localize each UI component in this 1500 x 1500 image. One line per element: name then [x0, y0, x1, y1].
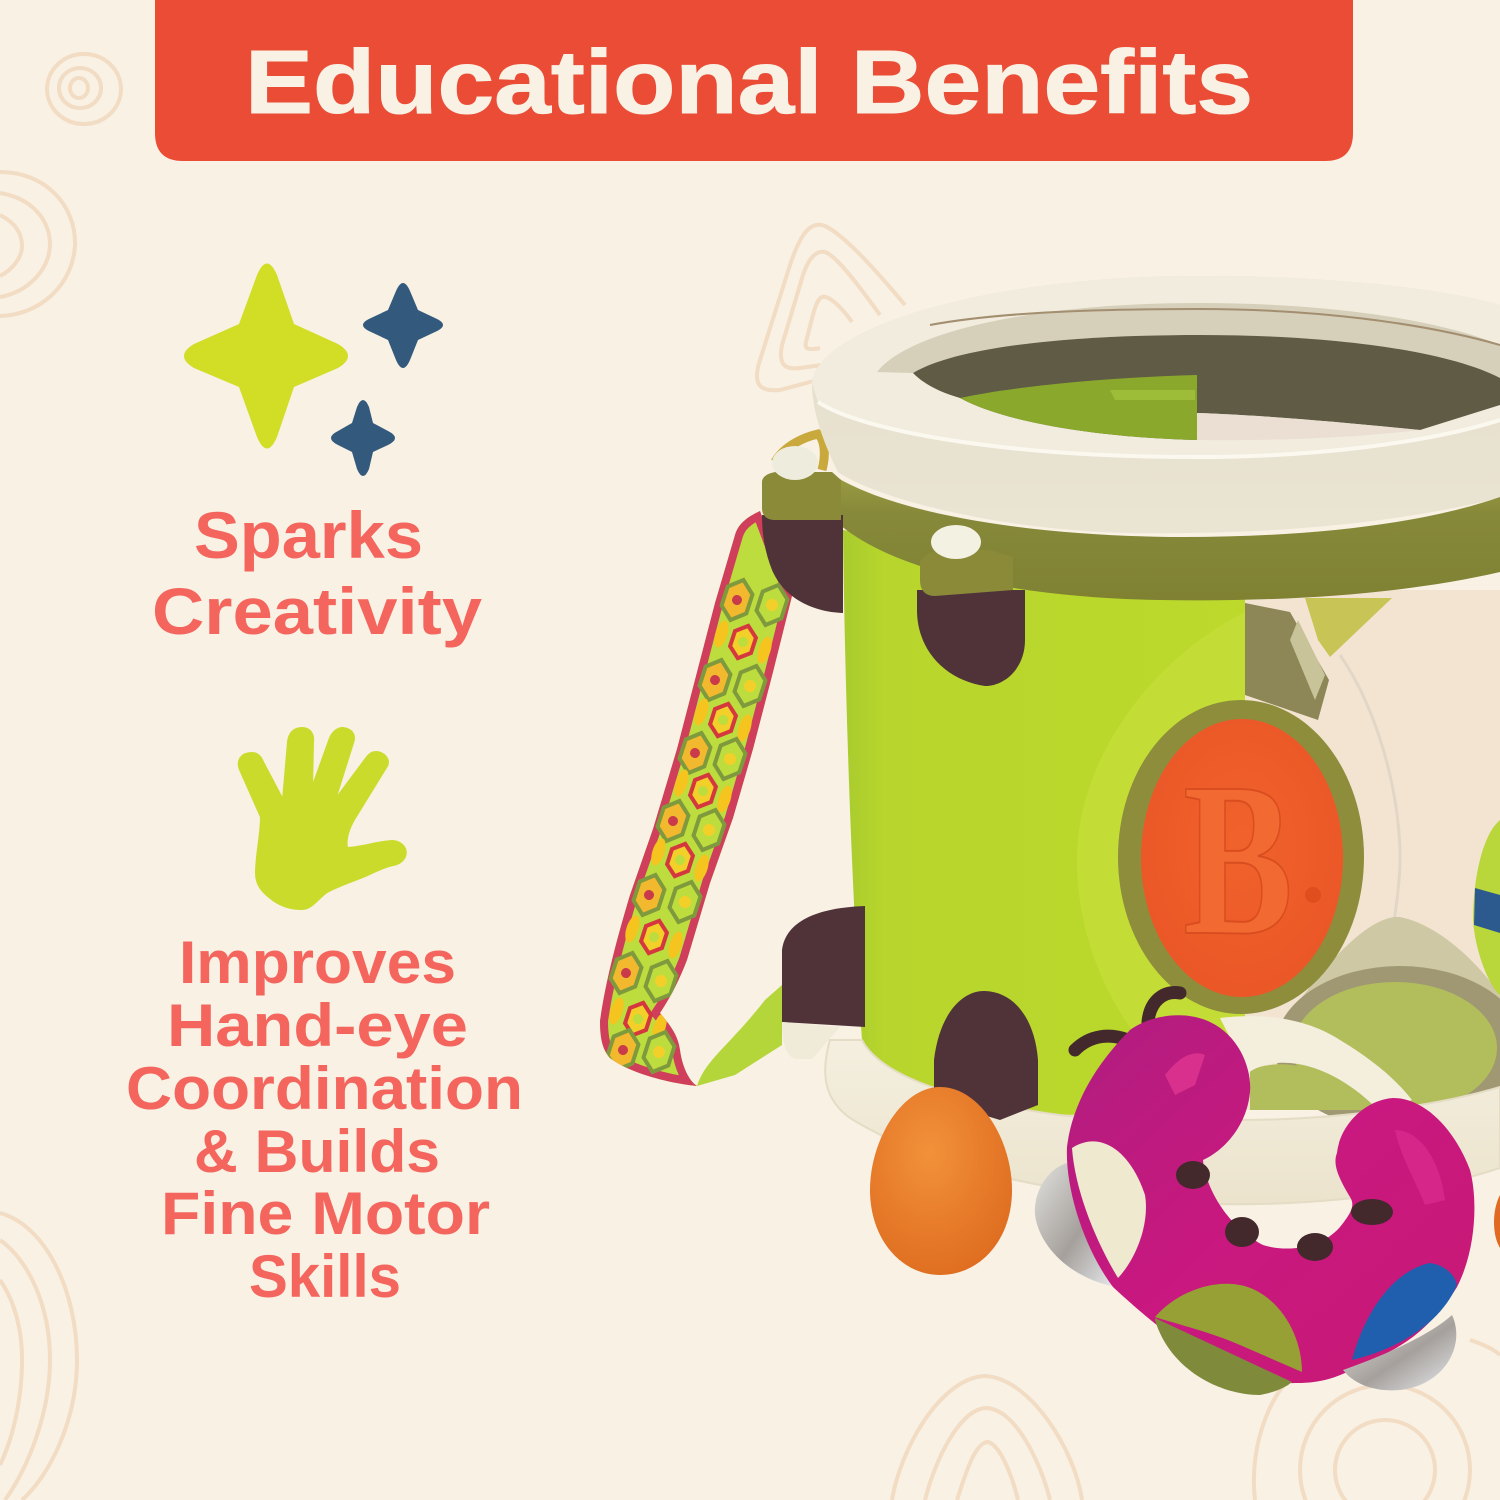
title: Educational Benefits	[245, 33, 1253, 133]
base ring	[825, 1040, 1500, 1204]
right edge orange shaker	[1494, 1195, 1500, 1248]
text: Improves Hand-eye Coordination & Builds Fine Motor Skills: & Builds	[194, 1118, 440, 1185]
text: Improves Hand-eye Coordination & Builds Fine Motor Skills: Skills	[249, 1243, 401, 1310]
text: Improves Hand-eye Coordination & Builds Fine Motor Skills: Hand-eye	[167, 992, 468, 1059]
B pad	[1118, 700, 1364, 1014]
tambourine	[1035, 992, 1474, 1395]
olive band	[836, 477, 1500, 600]
product photo: drum with shaker and tambourine	[590, 276, 1500, 1395]
text: Improves Hand-eye Coordination & Builds Fine Motor Skills: Improves	[179, 929, 456, 996]
clear drum side	[1245, 590, 1500, 1130]
text: Sparks Creativity	[152, 498, 482, 648]
strap	[600, 511, 792, 1086]
text: Sparks Creativity: Sparks	[194, 498, 423, 572]
B pad: B	[1183, 737, 1293, 981]
icon: hand	[239, 728, 406, 909]
text: Improves Hand-eye Coordination & Builds Fine Motor Skills: Fine Motor	[161, 1180, 490, 1247]
icon: sparkles	[184, 264, 443, 476]
text: Improves Hand-eye Coordination & Builds Fine Motor Skills: Coordination	[126, 1055, 523, 1122]
egg shaker	[870, 1087, 1012, 1275]
lower lugs	[782, 906, 1038, 1120]
green cloth tab	[697, 985, 782, 1086]
middle lug	[917, 525, 1025, 686]
drum rim	[812, 276, 1500, 533]
right edge shaker	[1473, 820, 1500, 995]
text: Sparks Creativity: Creativity	[152, 574, 482, 648]
title banner	[155, 0, 1353, 161]
top left lug	[762, 446, 843, 613]
text: Improves Hand-eye Coordination & Builds Fine Motor Skills	[126, 929, 523, 1310]
strap loop	[775, 434, 824, 470]
green drum body	[843, 530, 1245, 1115]
